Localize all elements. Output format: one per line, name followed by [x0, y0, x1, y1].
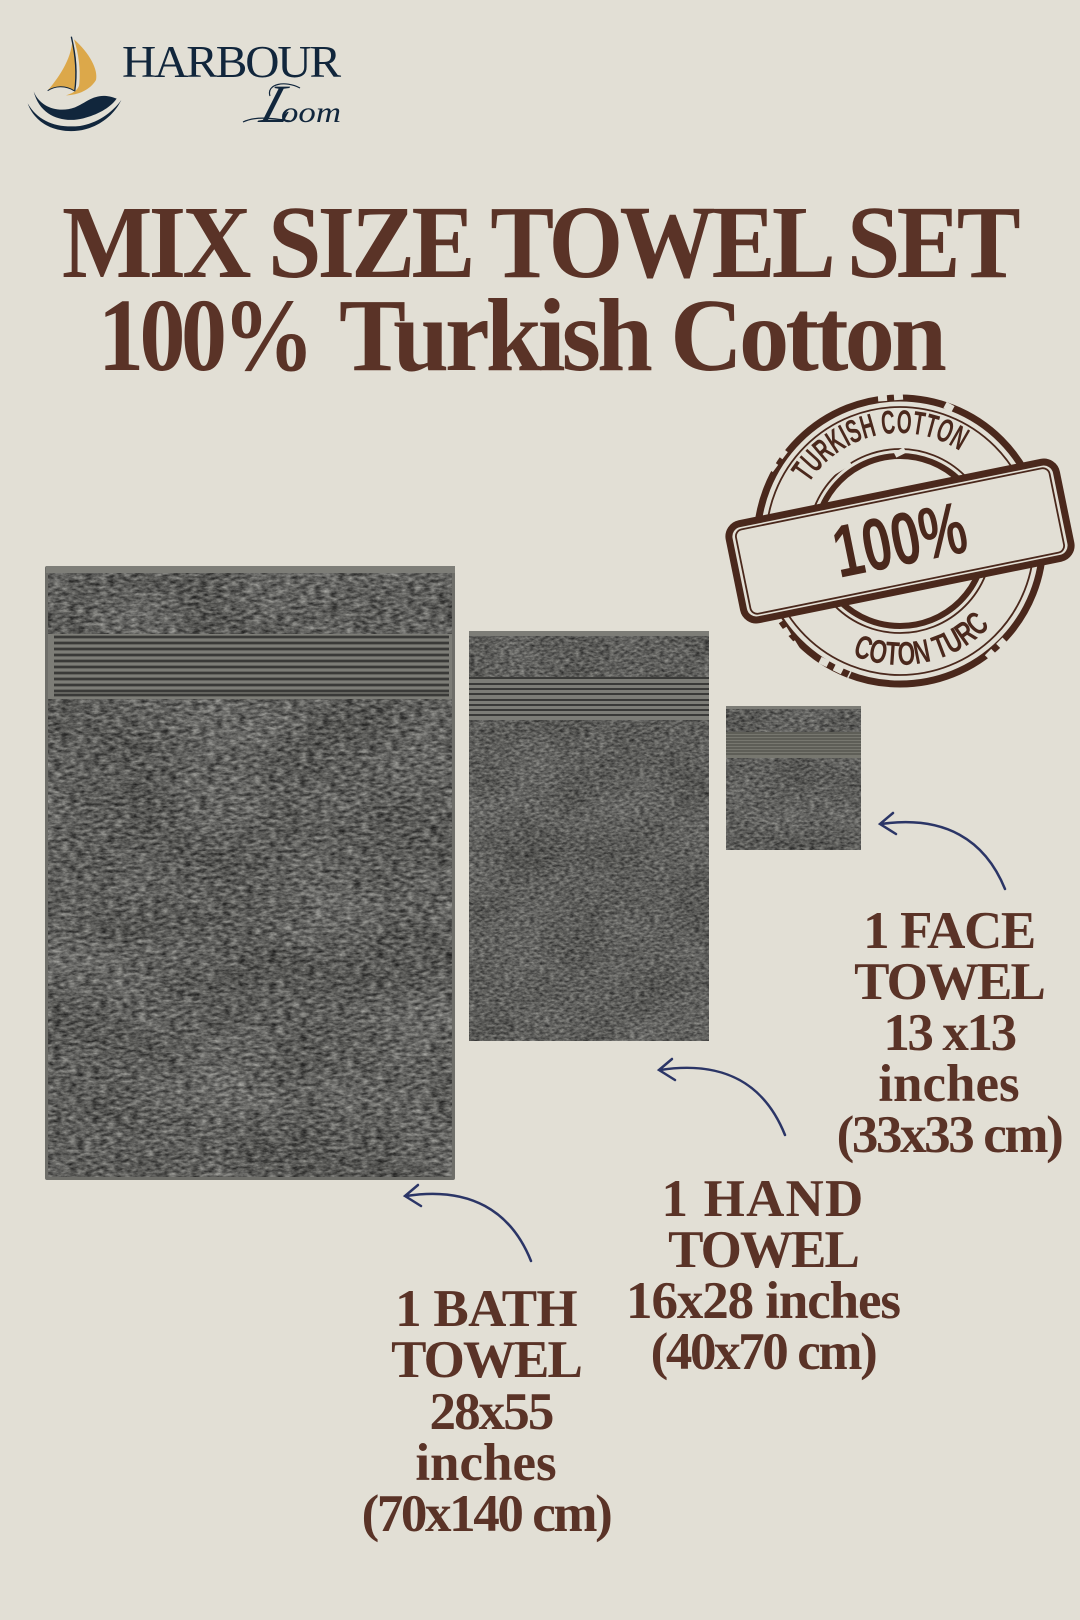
label: hand towel: 16x28 inches: [626, 1272, 900, 1330]
label: bath towel: 1 BATH: [395, 1280, 577, 1338]
label: face towel: [837, 902, 1062, 1164]
label: bath towel: [362, 1280, 611, 1543]
hand towel: [469, 631, 709, 1041]
label: hand towel: [626, 1170, 900, 1381]
wordmark: Loom: [243, 74, 341, 134]
wordmark: HARBOUR: HARBOUR: [122, 37, 341, 87]
bath towel: [45, 566, 455, 1180]
label: face towel: (33x33 cm): [837, 1106, 1062, 1164]
arrow: to bath towel: [405, 1185, 531, 1261]
label: hand towel: 1 HAND: [662, 1170, 864, 1228]
arrow: to face towel: [880, 813, 1005, 889]
stamp text: Turkish Cotton: TURKISH COTTON: [790, 410, 970, 480]
wordmark: Loom: oom: [281, 96, 341, 129]
stamp rings: [757, 398, 1043, 684]
label: bath towel: TOWEL: [391, 1331, 581, 1389]
title line 2: 100%: [98, 278, 310, 393]
title line 2: Turkish Cotton: [339, 278, 946, 393]
label: face towel: 13 x13: [883, 1004, 1016, 1062]
title: [62, 185, 1019, 393]
label: hand towel: TOWEL: [668, 1221, 858, 1279]
label: face towel: TOWEL: [854, 953, 1044, 1011]
label: bath towel: 28x55: [429, 1383, 553, 1441]
wordmark: Loom: L: [253, 74, 304, 134]
icon: sailboat: [28, 37, 121, 131]
logo: Harbour Loom: [28, 37, 341, 134]
face towel: [726, 706, 861, 850]
label: bath towel: inches: [415, 1434, 557, 1492]
title line 1: MIX SIZE TOWEL SET: [62, 185, 1019, 300]
stamp text: Coton Turc: COTON TURC: [856, 612, 988, 666]
label: face towel: inches: [878, 1055, 1020, 1113]
label: hand towel: (40x70 cm): [651, 1323, 876, 1381]
label: face towel: 1 FACE: [863, 902, 1035, 960]
stamp wear marks: [770, 396, 1005, 675]
stamp text: 100%: 100%: [826, 486, 974, 594]
stamp: 100% Turkish Cotton: [725, 394, 1075, 688]
stamp banner: [727, 460, 1073, 622]
label: bath towel: (70x140 cm): [362, 1485, 611, 1543]
arrow: to hand towel: [659, 1059, 785, 1135]
